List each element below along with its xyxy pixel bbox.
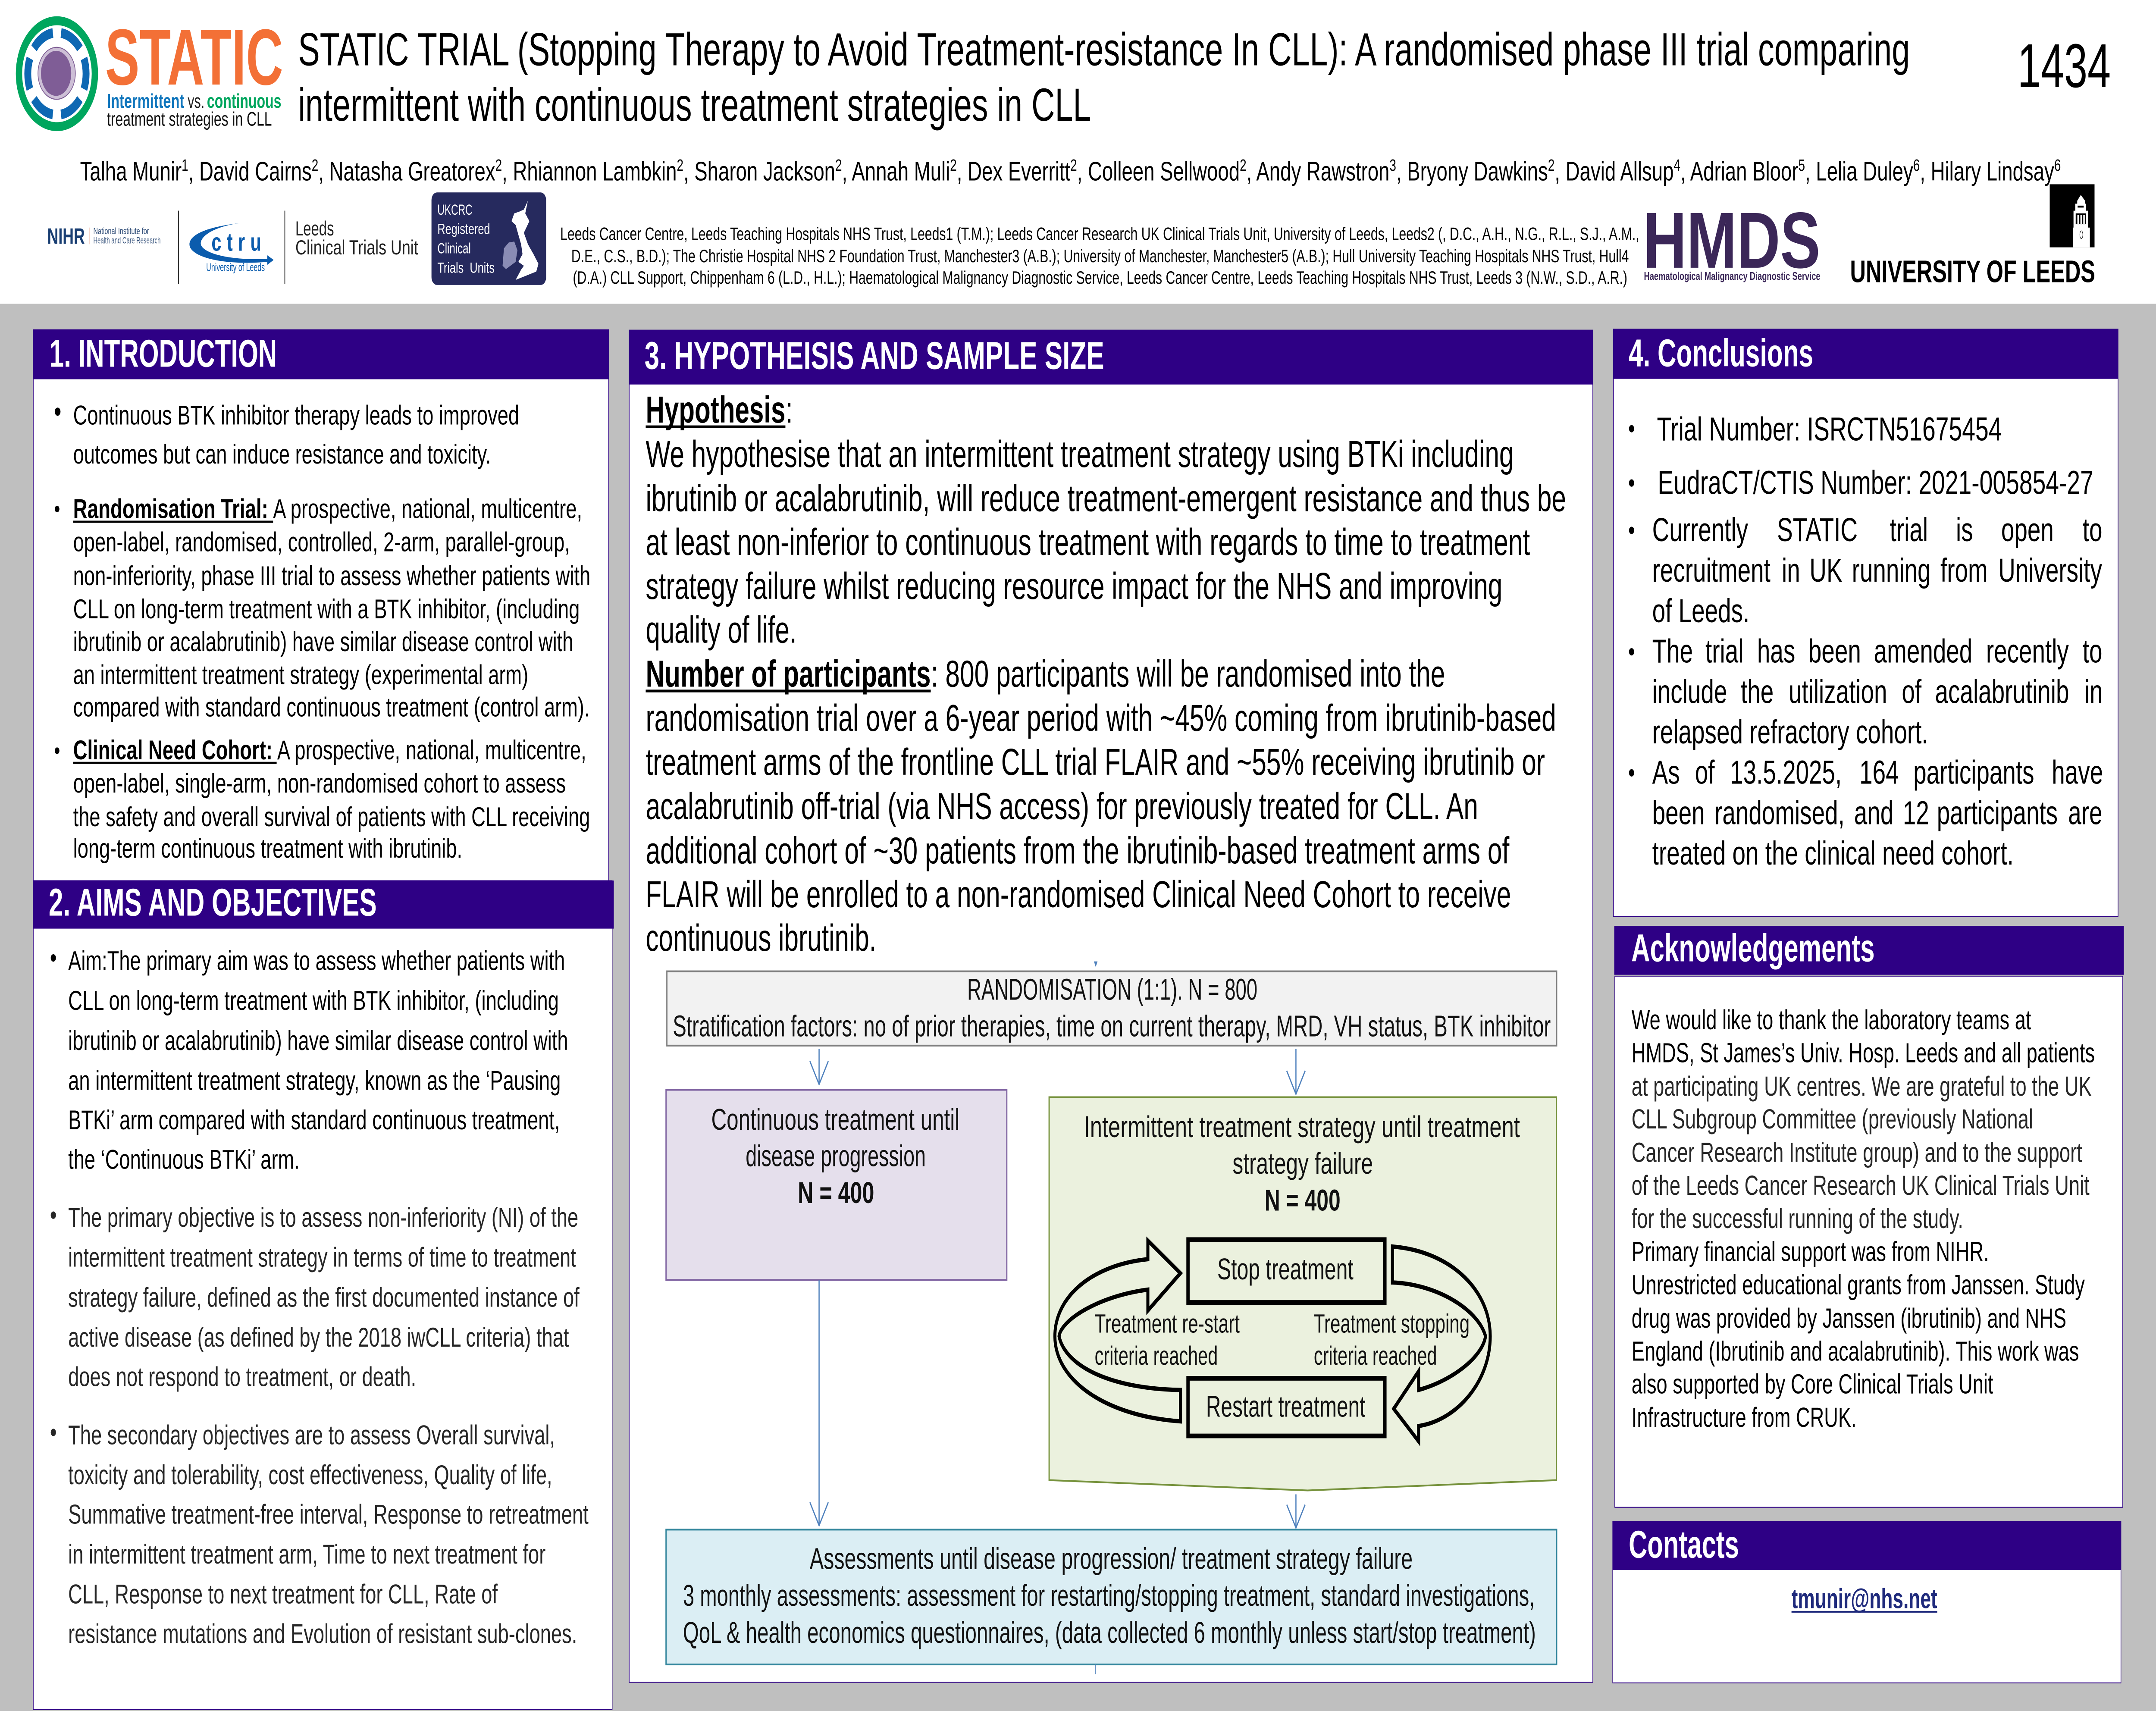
bullet: recruitment status: running <box>1852 552 1937 589</box>
text: hypothesis: ibrutinib or acalabrutinib, will reduce treatment-emergent resistance and thus be <box>646 478 1566 520</box>
logo: NIHR: National Institute for <box>94 226 149 236</box>
bullet: secondary objectives: resistance mutations and Evolution of resistant sub-clones. <box>68 1619 577 1649</box>
bullet: primary objective <box>51 1203 580 1392</box>
panel: 3. Hypothesis and sample size <box>629 330 1593 1682</box>
bullet: clinical need cohort <box>55 735 590 864</box>
icon: STATIC cell rings <box>19 21 95 127</box>
bullet: recruitment status: in <box>1782 552 1807 589</box>
text: acknowledgements body: Cancer Research Institute group) and to the support <box>1632 1137 2082 1168</box>
bullet: primary aim: BTKi’ arm compared with standard continuous treatment, <box>68 1105 560 1135</box>
heading: introduction: 1. INTRODUCTION <box>50 331 277 375</box>
bullet: clinical need cohort: the safety and overall survival of patients with CLL receiving <box>73 802 590 832</box>
box: intermittent treatment <box>1049 1097 1557 1490</box>
logo: University of Leeds <box>1850 184 2095 289</box>
box: restart treatment <box>1188 1378 1385 1436</box>
bullet: participants randomised: As <box>1652 754 1686 791</box>
text: acknowledgements body: also supported by Core Clinical Trials Unit <box>1632 1369 1993 1399</box>
text: acknowledgements body: Infrastructure from CRUK. <box>1632 1402 1856 1433</box>
arrow: randomisation to intermittent <box>1287 1049 1305 1094</box>
panel: acknowledgements <box>1614 926 2124 1507</box>
bullet: trial amendment: to <box>2083 633 2102 670</box>
authors: , Adrian Bloor <box>1680 157 1799 186</box>
logo: UKCRC registered clinical trials units: UKCRC <box>437 202 473 218</box>
text: hypothesis: strategy failure whilst reducing resource impact for the NHS and improving <box>646 565 1502 607</box>
heading: acknowledgements: Acknowledgements <box>1631 926 1875 970</box>
box: randomisation: Stratification factors: no of prior therapies, time on current therapy, MRD, VH status, BTK inhibitor <box>673 1009 1551 1043</box>
box: randomisation: RANDOMISATION (1:1). N = 800 <box>967 973 1257 1006</box>
bullet: trial amendment: in <box>2084 673 2103 711</box>
bullet: trial amendment: the <box>1741 673 1780 711</box>
box: continuous treatment: disease progression <box>746 1139 926 1173</box>
logo: UKCRC registered clinical trials units: Clinical <box>437 241 471 257</box>
logo: Leeds Clinical Trials Unit: Clinical Trials Unit <box>295 236 418 259</box>
logo: HMDS: HMDS <box>1643 196 1821 285</box>
logo: STATIC trial <box>19 13 283 130</box>
bullet: trial amendment: The <box>1652 633 1699 670</box>
text: acknowledgements body: Unrestricted educational grants from Janssen. Study <box>1632 1269 2085 1300</box>
affiliations <box>560 224 1639 288</box>
authors: , Bryony Dawkins <box>1396 157 1548 186</box>
authors: 2 <box>312 156 318 175</box>
flowchart <box>666 962 1557 1674</box>
authors: 6 <box>2054 156 2061 175</box>
bullet: trial number: Trial Number: ISRCTN51675454 <box>1657 411 2002 448</box>
text: number of participants: : 800 participants will be randomised into the <box>931 653 1445 695</box>
authors: 6 <box>1913 156 1920 175</box>
authors: , Annah Muli <box>842 157 950 186</box>
authors: , Andy Rawstron <box>1247 157 1389 186</box>
bullet: randomisation trial: Randomisation Trial: <box>73 494 268 524</box>
bullet: primary aim: CLL on long-term treatment with BTK inhibitor, (including <box>68 986 559 1016</box>
title: STATIC TRIAL (Stopping Therapy to Avoid Treatment-resistance In CLL): A randomised phase III trial comparing <box>298 23 1910 75</box>
logo: STATIC trial: Intermittent <box>107 89 184 113</box>
bullet: continuous BTK <box>55 400 519 470</box>
bullet: primary objective: intermittent treatment strategy in terms of time to treatment <box>68 1242 576 1273</box>
authors: , Hilary Lindsay <box>1920 157 2054 186</box>
text: hypothesis <box>646 389 1566 651</box>
bullet: trial amendment: utilization <box>1789 673 1894 711</box>
authors: 2 <box>677 156 683 175</box>
bullet: participants randomised: are <box>2068 794 2102 832</box>
box: intermittent treatment: strategy failure <box>1232 1147 1373 1180</box>
title: intermittent with continuous treatment strategies in CLL <box>298 78 1091 131</box>
logo: CTRU: ctru <box>211 228 261 256</box>
authors: , David Cairns <box>188 157 312 186</box>
bullet: secondary objectives: Summative treatment-free interval, Response to retreatment <box>68 1499 589 1529</box>
bullet: primary objective: active disease (as defined by the 2018 iwCLL criteria) that <box>68 1322 569 1353</box>
bullet: participants randomised: have <box>2052 754 2103 791</box>
bullet: participants randomised: of <box>1695 754 1721 791</box>
bullet: randomisation trial: CLL on long-term treatment with a BTK inhibitor, (including <box>73 594 580 624</box>
bullet: clinical need cohort: long-term continuous treatment with ibrutinib. <box>73 833 462 864</box>
box: stop treatment <box>1188 1240 1385 1303</box>
bullet: randomisation trial: A prospective, national, multicentre, <box>273 494 582 524</box>
bullet: recruitment status: UK <box>1809 552 1849 589</box>
text: acknowledgements body: Primary financial support was from NIHR. <box>1632 1236 1989 1267</box>
authors: , Lelia Duley <box>1805 157 1913 186</box>
text: acknowledgements body <box>1632 1004 2095 1433</box>
text: hypothesis: : <box>786 389 793 431</box>
logo: University of Leeds: UNIVERSITY OF LEEDS <box>1850 255 2095 289</box>
bullet: primary aim: Aim:The primary aim was to assess whether patients with <box>68 946 565 976</box>
bullet: trial amendment: trial <box>1705 633 1750 670</box>
affiliations: (D.A.) CLL Support, Chippenham 6 (L.D., H.L.); Haematological Malignancy Diagnostic Service, Leeds Cancer Centre, Leeds Teaching Hospitals NHS Trust, Leeds 3 (N.W., S.D., A.R.) <box>573 268 1627 288</box>
logo: NIHR: NIHR <box>47 223 85 249</box>
arrow: stop to restart <box>1392 1247 1490 1442</box>
text: acknowledgements body: of the Leeds Cancer Research UK Clinical Trials Unit <box>1632 1170 2090 1201</box>
authors: 2 <box>1070 156 1077 175</box>
text: acknowledgements body: We would like to thank the laboratory teams at <box>1632 1004 2031 1035</box>
text: number of participants: acalabrutinib off-trial (via NHS access) for previously treated for CLL. An <box>646 786 1478 827</box>
bullet: secondary objectives: CLL, Response to next treatment for CLL, Rate of <box>68 1579 498 1610</box>
panel: 1. Introduction <box>33 329 609 881</box>
authors: 2 <box>495 156 502 175</box>
heading: contacts: Contacts <box>1629 1523 1739 1566</box>
logo: Leeds Clinical Trials Unit: Leeds <box>295 217 334 240</box>
affiliations: D.E., C.S., B.D.); The Christie Hospital NHS 2 Foundation Trust, Manchester3 (A.B.); University of Manchester, Manchester5 (A.B.); Hull University Teaching Hospitals NHS Trust, Hull4 <box>571 246 1629 266</box>
heading: conclusions: 4. Conclusions <box>1629 331 1813 375</box>
bullet: continuous BTK: outcomes but can induce resistance and toxicity. <box>73 439 491 470</box>
text: hypothesis: at least non-inferior to continuous treatment with regards to time to treatment <box>646 522 1530 564</box>
authors: , Colleen Sellwood <box>1077 157 1240 186</box>
text: number of participants: randomisation trial over a 6-year period with ~45% coming from ibrutinib-based <box>646 698 1556 740</box>
bullet: secondary objectives: in intermittent treatment arm, Time to next treatment for <box>68 1539 545 1570</box>
bullet: recruitment status: Currently <box>1652 511 1755 548</box>
authors: , Sharon Jackson <box>683 157 835 186</box>
box: assessments: Assessments until disease progression/ treatment strategy failure <box>810 1542 1413 1576</box>
logo: UKCRC registered clinical trials units <box>432 192 546 285</box>
box: intermittent treatment: N = 400 <box>1265 1184 1341 1217</box>
bullet: participants randomised: participants <box>1937 794 2064 832</box>
logo: STATIC trial: vs. <box>188 91 204 113</box>
text: hypothesis: We hypothesise that an intermittent treatment strategy using BTKi including <box>646 434 1514 475</box>
bullet: EudraCT number: EudraCT/CTIS Number: 2021-005854-27 <box>1658 464 2093 501</box>
bullet: clinical need cohort: A prospective, national, multicentre, <box>277 735 586 765</box>
poster number: 1434 <box>2018 31 2111 100</box>
bullet: primary objective: strategy failure, defined as the first documented instance of <box>68 1282 580 1313</box>
logo: STATIC trial: continuous <box>207 89 281 113</box>
box: intermittent treatment: Intermittent treatment strategy until treatment <box>1084 1110 1520 1144</box>
bullet: participants randomised: 12 <box>1903 794 1936 832</box>
logo: CTRU: University of Leeds <box>206 261 265 273</box>
text: hypothesis: quality of life. <box>646 609 797 651</box>
panel: 4. Conclusions <box>1613 329 2118 916</box>
box: randomisation <box>667 971 1557 1046</box>
bullet: trial amendment: of <box>1902 673 1928 711</box>
text: acknowledgements body: at participating UK centres. We are grateful to the UK <box>1632 1071 2092 1102</box>
bullet: randomisation trial: compared with standard continuous treatment (control arm). <box>73 692 589 722</box>
logo: UKCRC registered clinical trials units: Registered <box>437 221 490 238</box>
box: continuous treatment <box>666 1090 1007 1280</box>
logo: NIHR: Health and Care Research <box>94 235 160 245</box>
bullet: participants randomised: treated on the clinical need cohort. <box>1652 835 2014 872</box>
bullet: trial amendment: acalabrutinib <box>1935 673 2076 711</box>
bullet: recruitment status: of Leeds. <box>1652 592 1749 630</box>
label: stopping criteria <box>1314 1309 1470 1371</box>
bullet: participants randomised: and <box>1854 794 1900 832</box>
bullet: randomisation trial <box>55 494 590 722</box>
logo: NIHR <box>47 223 160 249</box>
bullet: trial amendment <box>1629 633 2103 751</box>
bullet: randomisation trial: ibrutinib or acalabrutinib) have similar disease control with <box>73 627 573 657</box>
bullet: secondary objectives: The secondary objectives are to assess Overall survival, <box>68 1420 555 1450</box>
bullet: recruitment status <box>1629 511 2102 630</box>
bullet: recruitment status: recruitment <box>1652 552 1777 589</box>
contact email: tmunir@nhs.net <box>1792 1583 1937 1614</box>
bullet: secondary objectives: toxicity and tolerability, cost effectiveness, Quality of life, <box>68 1460 552 1490</box>
bullet: randomisation trial: an intermittent treatment strategy (experimental arm) <box>73 660 528 690</box>
logo: STATIC trial: STATIC <box>105 13 283 101</box>
arrow: restart to stop <box>1055 1241 1181 1421</box>
bullet: clinical need cohort: open-label, single-arm, non-randomised cohort to assess <box>73 768 566 799</box>
bullet: participants randomised: 13.5.2025, <box>1730 754 1849 791</box>
bullet: trial amendment: include <box>1652 673 1734 711</box>
authors: 2 <box>950 156 957 175</box>
text: number of participants: continuous ibrutinib. <box>646 918 877 959</box>
bullet: secondary objectives <box>51 1420 589 1649</box>
authors: 5 <box>1799 156 1805 175</box>
bullet: clinical need cohort: Clinical Need Cohort: <box>73 735 273 765</box>
bullet: participants randomised: 164 <box>1859 754 1905 791</box>
logo: UKCRC registered clinical trials units: Trials Units <box>437 260 495 276</box>
authors: Talha Munir <box>80 157 179 186</box>
text: hypothesis: Hypothesis <box>646 389 785 431</box>
bullet: recruitment status: STATIC <box>1777 511 1864 548</box>
heading: aims and objectives: 2. AIMS AND OBJECTIVES <box>49 881 377 924</box>
title <box>298 23 1910 131</box>
authors: 1 <box>182 156 188 175</box>
bullet: participants randomised: participants <box>1913 754 2041 791</box>
text: acknowledgements body: HMDS, St James’s Univ. Hosp. Leeds and all patients <box>1632 1037 2095 1068</box>
authors: , David Allsup <box>1554 157 1673 186</box>
logo: CTRU <box>189 223 274 273</box>
box: assessments: 3 monthly assessments: assessment for restarting/stopping treatment, standard investigations, <box>683 1579 1535 1612</box>
bullet: recruitment status: open <box>2001 511 2060 548</box>
bullet: primary objective: The primary objective is to assess non-inferiority (NI) of the <box>68 1203 578 1233</box>
text: number of participants: FLAIR will be enrolled to a non-randomised Clinical Need Cohort to receive <box>646 874 1511 916</box>
bullet: trial amendment: has <box>1757 633 1802 670</box>
bullet: trial amendment: recently <box>1986 633 2075 670</box>
arrow: intermittent to assessments <box>1287 1494 1305 1528</box>
authors: 2 <box>1240 156 1247 175</box>
bullet: primary aim <box>51 946 568 1175</box>
label: re-start criteria: criteria reached <box>1095 1341 1218 1371</box>
label: re-start criteria <box>1095 1309 1240 1371</box>
arrow: continuous to assessments <box>810 1280 828 1526</box>
authors: 2 <box>835 156 842 175</box>
bullet: primary aim: the ‘Continuous BTKi’ arm. <box>68 1144 300 1175</box>
authors: 4 <box>1673 156 1680 175</box>
bullet: participants randomised: randomised, <box>1714 794 1851 832</box>
header <box>19 13 2111 289</box>
text: acknowledgements body: England (Ibrutinib and acalabrutinib). This work was <box>1632 1336 2079 1366</box>
icon: UK map <box>502 201 539 280</box>
text: acknowledgements body: for the successful running of the study. <box>1632 1203 1963 1234</box>
arrow: randomisation to continuous <box>810 1049 828 1084</box>
bullet: primary objective: does not respond to treatment, or death. <box>68 1362 416 1392</box>
heading: hypothesis and sample size: 3. HYPOTHEISIS AND SAMPLE SIZE <box>645 334 1104 377</box>
box: assessments: QoL & health economics questionnaires, (data collected 6 monthly unless start/stop treatment) <box>683 1616 1536 1649</box>
panel: contacts <box>1612 1521 2121 1683</box>
affiliations: Leeds Cancer Centre, Leeds Teaching Hospitals NHS Trust, Leeds1 (T.M.); Leeds Cancer Research UK Clinical Trials Unit, University of Leeds, Leeds2 (, D.C., A.H., N.G., R.L., S.J., A.M., <box>560 224 1639 244</box>
text: number of participants: treatment arms of the frontline CLL trial FLAIR and ~55% receiving ibrutinib or <box>646 742 1545 783</box>
bullet: recruitment status: to <box>2083 511 2102 548</box>
bullet: continuous BTK: Continuous BTK inhibitor therapy leads to improved <box>73 400 519 430</box>
bullet: recruitment status: is <box>1956 511 1980 548</box>
bullet: trial amendment: been <box>1808 633 1868 670</box>
authors: 3 <box>1389 156 1396 175</box>
box: continuous treatment: Continuous treatment until <box>711 1103 959 1136</box>
authors: , Rhiannon Lambkin <box>502 157 677 186</box>
box: restart treatment: Restart treatment <box>1206 1390 1366 1423</box>
bullet: primary aim: ibrutinib or acalabrutinib) have similar disease control with <box>68 1025 568 1056</box>
bullet: trial amendment: relapsed refractory cohort. <box>1652 714 1928 751</box>
logo: STATIC trial: treatment strategies in CLL <box>107 109 272 130</box>
box: stop treatment: Stop treatment <box>1217 1253 1354 1286</box>
panel: 2. Aims and objectives <box>33 881 614 1710</box>
authors: , Natasha Greatorex <box>318 157 495 186</box>
bullet: participants randomised <box>1629 754 2103 872</box>
text: number of participants: Number of participants <box>646 653 931 695</box>
label: stopping criteria: criteria reached <box>1314 1341 1437 1371</box>
bullet: recruitment status: trial <box>1890 511 1934 548</box>
bullet: recruitment status: University <box>1998 552 2102 589</box>
label: stopping criteria: Treatment stopping <box>1314 1309 1470 1338</box>
box: continuous treatment: N = 400 <box>798 1176 874 1210</box>
logo: Leeds Clinical Trials Unit <box>295 217 418 259</box>
logo: HMDS: Haematological Malignancy Diagnostic Service <box>1644 270 1821 282</box>
text: number of participants: additional cohort of ~30 patients from the ibrutinib-based treatment arms of <box>646 830 1510 872</box>
authors: , Dex Everritt <box>957 157 1070 186</box>
label: re-start criteria: Treatment re-start <box>1095 1309 1240 1338</box>
text: acknowledgements body: drug was provided by Janssen (ibrutinib) and NHS <box>1632 1303 2066 1334</box>
bullet: trial amendment: amended <box>1874 633 1979 670</box>
authors: 2 <box>1548 156 1554 175</box>
bullet: primary aim: an intermittent treatment strategy, known as the ‘Pausing <box>68 1065 561 1096</box>
bullet: randomisation trial: open-label, randomised, controlled, 2-arm, parallel-group, <box>73 527 570 557</box>
box: assessments <box>666 1529 1557 1664</box>
bullet: randomisation trial: non-inferiority, phase III trial to assess whether patients with <box>73 561 590 591</box>
bullet: recruitment status: from <box>1940 552 1994 589</box>
bullet: participants randomised: been <box>1652 794 1711 832</box>
text: number of participants <box>646 653 1556 959</box>
text: acknowledgements body: CLL Subgroup Committee (previously National <box>1632 1103 2033 1134</box>
